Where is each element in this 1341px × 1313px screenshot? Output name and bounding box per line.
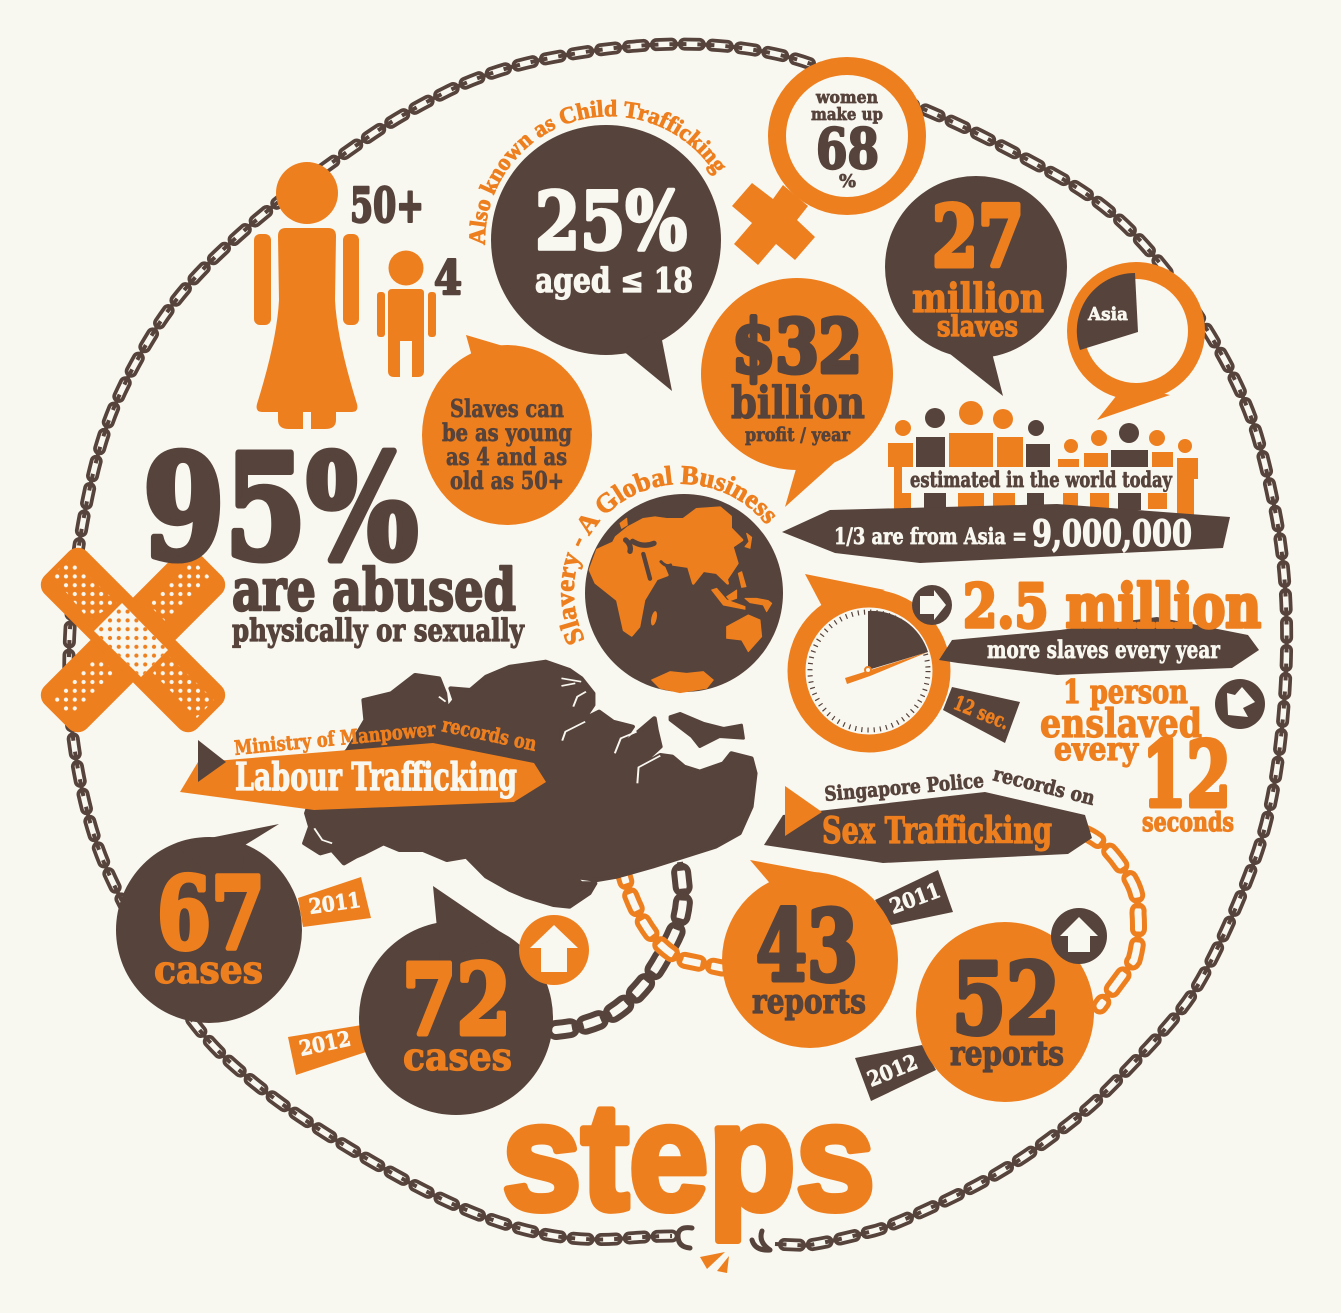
banner: labour trafficking: records on (440, 712, 539, 756)
banner: more slaves every year (939, 617, 1259, 675)
speech bubble: 67 cases 2011: 2011 (307, 887, 362, 919)
stat: 1 person enslaved every 12 seconds: 1 person (1063, 672, 1188, 711)
speech bubble: slaves can be as young as 4 and as old as 50+: be as young (442, 418, 572, 447)
map of Singapore (304, 662, 755, 907)
speech bubble: $32 billion profit per year: billion (731, 378, 865, 429)
globe (585, 494, 783, 693)
speech bubble: 67 cases 2011: 67 (157, 856, 265, 972)
speech bubble: 72 cases 2012: cases (403, 1034, 512, 1079)
female symbol: women make up 68%: 68 (816, 116, 879, 181)
speech bubble: 27 million slaves: 27 (932, 187, 1024, 286)
speech bubble: 52 reports 2012 (855, 922, 1094, 1102)
female symbol: women make up 68%: women (815, 88, 878, 108)
speech bubble: 27 million slaves: slaves (937, 310, 1018, 343)
stat: 95% are abused: 95% (143, 423, 418, 592)
stat: 1 person enslaved every 12 seconds: every (1054, 730, 1139, 768)
speech bubble: 52 reports 2012: 2012 (864, 1049, 921, 1092)
speech bubble: 72 cases 2012 (288, 886, 553, 1115)
banner: labour trafficking (180, 712, 546, 810)
speech bubble: 43 reports 2011: 2011 (886, 877, 944, 919)
female symbol: women make up 68%: % (839, 171, 856, 192)
label: 4: 4 (434, 251, 462, 306)
chain: orange, from sex trafficking banner to 52 reports (1082, 832, 1138, 1006)
speech bubble: 67 cases 2011 (116, 824, 371, 1023)
title word: steps: steps (502, 1072, 875, 1242)
speech bubble: 72 cases 2012: 2012 (297, 1026, 353, 1061)
female symbol: women make up 68%: make up (811, 105, 883, 125)
shards below title (700, 1252, 729, 1273)
speech bubble: $32 billion profit per year: $32 (732, 304, 862, 390)
chain: orange, from map to 43 reports (622, 868, 722, 968)
chain: brown, from 72 cases to map (556, 862, 683, 1030)
speech bubble: slaves can be as young as 4 and as old as 50+: old as 50+ (450, 466, 564, 495)
child figure (377, 250, 436, 377)
banner: 1/3 are from Asia = 9,000,000: 9,000,000 (1032, 513, 1192, 555)
plaster cross (35, 542, 231, 738)
stat: 2.5 million: 2.5 million (963, 572, 1261, 642)
banner: labour trafficking: Ministry of Manpower (233, 717, 437, 760)
stopwatch: 12 sec (796, 574, 1020, 744)
stat: 1 person enslaved every 12 seconds: enslaved (1040, 701, 1202, 747)
banner: 1/3 are from Asia = 9,000,000: 1/3 are from Asia = (834, 524, 1027, 550)
banner: labour trafficking: Labour Trafficking (235, 754, 517, 799)
banner: sex trafficking: Singapore Police (823, 768, 985, 806)
banner: sex trafficking: Sex Trafficking (822, 810, 1052, 852)
speech bubble: slaves can be as young as 4 and as old as 50+: Slaves can (450, 394, 564, 423)
people row: estimated in the world today (888, 401, 1198, 515)
speech bubble: 43 reports 2011 (722, 860, 953, 1048)
woman figure (254, 162, 359, 429)
speech bubble: 67 cases 2011: cases (154, 947, 263, 992)
stat: 95% are abused: are abused (232, 556, 516, 624)
speech bubble: 43 reports 2011: reports (752, 982, 866, 1022)
speech bubble: 25% aged 18 or under: 25% (535, 174, 687, 268)
stopwatch: 12 sec: 12 sec. (950, 690, 1013, 734)
arrow icon: up, orange (519, 915, 589, 985)
curved heading: slavery a global business: Slavery - A Global Business (559, 465, 776, 645)
stat: 95% are abused: physically or sexually (232, 613, 525, 649)
speech bubble: slaves can be as young as 4 and as old as 50+ (422, 335, 592, 525)
speech bubble: 27 million slaves: million (912, 275, 1044, 322)
pie bubble: Asia share: Asia (1087, 304, 1128, 325)
banner: sex trafficking: records on (991, 762, 1098, 810)
curved heading: also known as child trafficking: Also known as Child Trafficking (469, 100, 726, 246)
pie bubble: Asia share (1067, 262, 1205, 420)
speech bubble: 52 reports 2012: reports (950, 1034, 1064, 1074)
speech bubble: 25% aged 18 or under (491, 125, 721, 391)
banner: more slaves every year: more slaves every year (987, 635, 1220, 664)
speech bubble: $32 billion profit per year (701, 278, 893, 507)
people row: estimated in the world today: estimated in the world today (910, 467, 1173, 492)
stat: 95% are abused (143, 423, 525, 649)
female symbol: women make up 68% (732, 66, 917, 265)
arrow icon: down-left (1215, 679, 1265, 729)
stat: 1 person enslaved every 12 seconds (1040, 672, 1234, 838)
speech bubble: 43 reports 2011: 43 (756, 889, 858, 1003)
speech bubble: 72 cases 2012: 72 (402, 943, 511, 1057)
speech bubble: $32 billion profit per year: profit / year (745, 424, 851, 446)
stat: 1 person enslaved every 12 seconds: 12 (1142, 722, 1231, 828)
speech bubble: 27 million slaves (885, 176, 1067, 396)
speech bubble: 25% aged 18 or under: aged ≤ 18 (535, 261, 693, 301)
speech bubble: 52 reports 2012: 52 (952, 942, 1060, 1056)
label: 50+: 50+ (350, 178, 424, 234)
arrow icon: right (912, 585, 952, 625)
banner: sex trafficking (764, 762, 1098, 863)
stat: 1 person enslaved every 12 seconds: seconds (1142, 808, 1234, 838)
arrow icon: up, brown (1051, 908, 1107, 964)
speech bubble: slaves can be as young as 4 and as old as 50+: as 4 and as (446, 442, 567, 471)
banner: 1/3 are from Asia = 9,000,000 (782, 504, 1230, 563)
